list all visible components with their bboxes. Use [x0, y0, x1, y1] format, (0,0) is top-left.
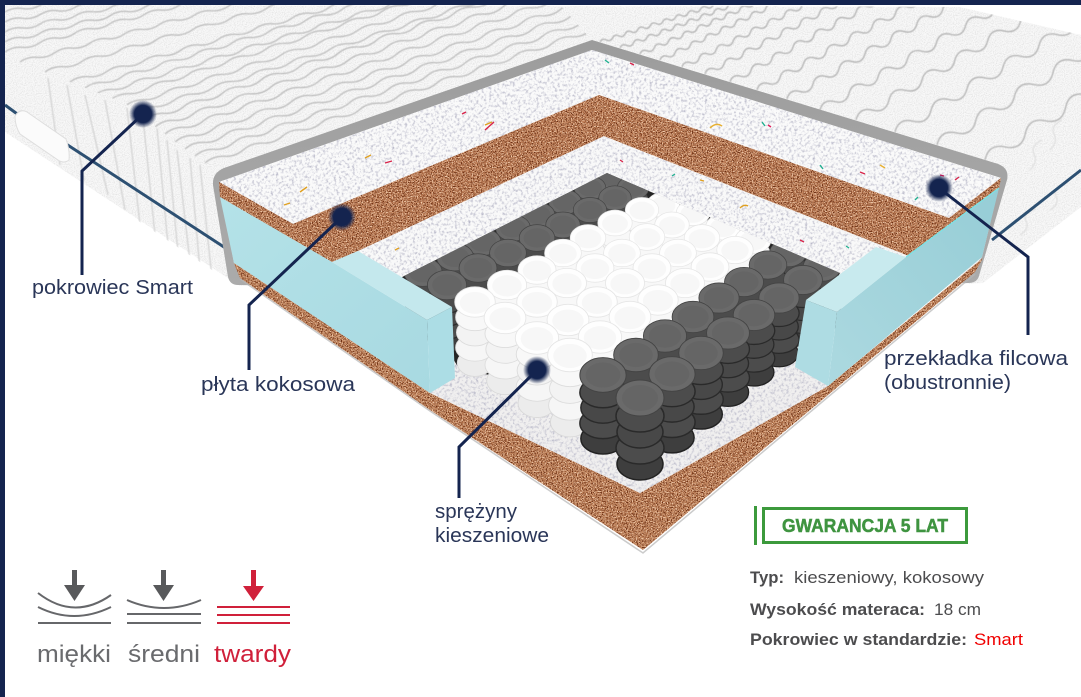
mattress with cross-section — [5, 0, 1081, 553]
badge text: GWARANCJA 5 LAT — [782, 516, 948, 536]
label: firm: twardy — [214, 641, 291, 668]
leader line — [459, 370, 537, 498]
spec: type: Typ: — [750, 568, 784, 587]
side bumps right — [1020, 120, 1066, 235]
marker dot — [328, 203, 356, 231]
spring floor felt — [430, 300, 828, 493]
callout: sprężyny kieszeniowe — [435, 356, 551, 547]
firmness legend — [37, 570, 291, 668]
callout: przekładka filcowa — [884, 174, 1069, 394]
felt colour fibres — [284, 60, 959, 205]
leader line — [249, 217, 342, 370]
inner felt colour fibres — [395, 160, 849, 250]
coir board top — [219, 95, 1001, 262]
foam top face — [332, 251, 452, 320]
label: kieszeniowe — [435, 525, 549, 547]
bottom edge felt sliver — [240, 274, 975, 553]
leader line — [82, 114, 143, 275]
foam end face — [795, 300, 837, 386]
badge frame — [764, 508, 966, 542]
label: (obustronnie) — [884, 372, 1011, 394]
left foam block — [220, 197, 455, 393]
side pleats left — [48, 78, 212, 278]
foam side face — [828, 188, 999, 386]
label: sprężyny — [435, 501, 517, 523]
foam end face — [427, 307, 455, 393]
guarantee badge — [754, 506, 966, 545]
icon: firm — [217, 570, 290, 623]
label: soft: miękki — [37, 641, 111, 668]
label: przekładka filcowa — [884, 348, 1069, 370]
grey cut frame — [213, 40, 1007, 285]
marker dot — [925, 174, 953, 202]
marker dot — [129, 100, 157, 128]
badge bar — [754, 506, 757, 545]
piping right — [992, 170, 1081, 240]
spec: cover: Smart — [974, 630, 1023, 649]
callout: płyta kokosowa — [201, 203, 356, 396]
marker dot — [523, 356, 551, 384]
spec: height: Wysokość materaca: — [750, 600, 925, 619]
label: płyta kokosowa — [201, 374, 356, 396]
mattress cover body — [5, 5, 1081, 286]
label: pokrowiec Smart — [32, 277, 193, 299]
callout: pokrowiec Smart — [32, 100, 193, 299]
foam highlight edge — [906, 188, 999, 257]
spec: height: 18 cm — [934, 600, 981, 619]
inner felt layer — [358, 136, 906, 277]
spring units — [404, 166, 841, 480]
right foam block — [795, 188, 999, 386]
icon: medium — [127, 570, 201, 623]
label: medium: średni — [128, 641, 200, 668]
product specification — [750, 568, 1023, 649]
spec: type: kieszeniowy, kokosowy — [794, 568, 985, 587]
coir board bottom — [234, 258, 983, 550]
foam side face — [220, 197, 430, 393]
foam top face — [806, 247, 906, 312]
quilted waves left surface — [5, 5, 586, 164]
leader line — [939, 188, 1028, 335]
spec: cover: Pokrowiec w standardzie: — [750, 630, 967, 649]
pocket springs — [402, 166, 841, 480]
mattress handle — [15, 111, 69, 162]
top felt layer — [219, 50, 1001, 224]
icon: soft — [38, 570, 111, 623]
quilted waves right surface — [599, 0, 1081, 165]
piping left — [5, 105, 227, 249]
dark spring well — [402, 173, 840, 375]
